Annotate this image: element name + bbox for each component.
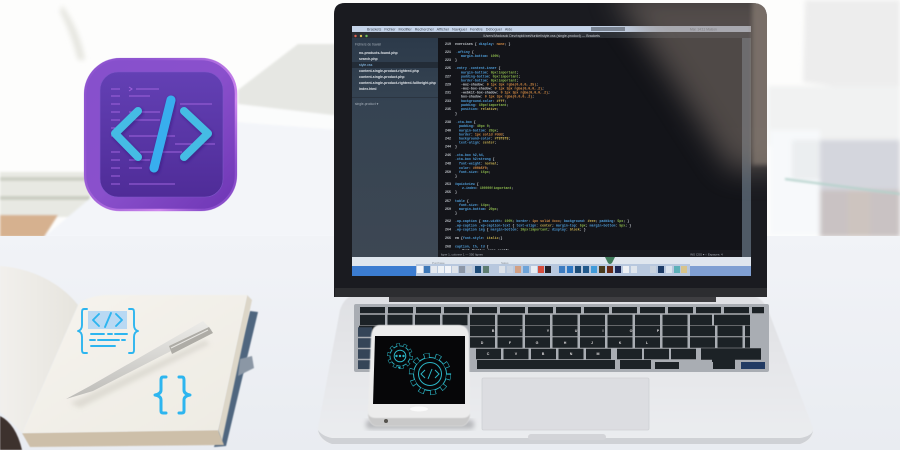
code editor: } (455, 211, 457, 215)
file sidebar: content-single-product-rightred-fullheight.php (359, 81, 436, 85)
code editor: border: 1px solid #ddd; (459, 132, 505, 136)
code editor: padding: 40px 0; (459, 124, 491, 128)
keyboard keys: V (515, 352, 518, 356)
keyboard keys: P (657, 329, 660, 333)
phone shadow (366, 420, 474, 429)
code editor: .entry .content-inner { (455, 66, 501, 70)
file sidebar: index.html (359, 87, 377, 91)
icon: curly braces (155, 377, 190, 413)
menu bar (352, 26, 751, 32)
code editor: z-index: 100000!important; (462, 186, 513, 190)
code editor: 242 (445, 136, 451, 140)
code editor: -moz-shadow: 0 1px 3px rgba(0,0,0,.25); (461, 82, 538, 86)
gear: large with code symbol (412, 356, 448, 392)
badge body (84, 58, 237, 211)
file sidebar: search.php (359, 57, 378, 61)
notebook page block (22, 430, 224, 447)
notebook right page (22, 295, 247, 433)
gear: small with dots (389, 345, 411, 367)
code editor: .cta-box { (456, 120, 476, 124)
code editor: font-size: 16px; (459, 170, 491, 174)
code editor: 231 (445, 90, 451, 94)
keyboard well (354, 304, 769, 372)
code editor: color: #00b5f0; (459, 166, 489, 170)
code editor: .wp-caption .wp-caption-text { text-align: center; margin-top: 5px; margin-bottom: 5px; } (455, 224, 631, 228)
pen shadow (70, 340, 210, 408)
keyboard keys: B (542, 352, 545, 356)
keyboard keys: G (536, 341, 539, 345)
keyboard keys: I (602, 329, 604, 333)
phone (366, 325, 474, 429)
phone screen (373, 336, 465, 404)
badge rim highlight (85, 59, 236, 210)
keyboard keys: C (487, 352, 490, 356)
code editor: font-size: 14px; (459, 203, 491, 207)
notebook left page (0, 266, 78, 433)
notebook cover edge (214, 311, 258, 447)
icon: purple code app badge (84, 58, 237, 211)
code editor: padding: 10px!important; (461, 103, 509, 107)
code editor: 219 (445, 42, 451, 46)
screen (352, 26, 751, 276)
phone home button (410, 406, 428, 412)
notebook (0, 266, 258, 450)
keyboard keys: N (570, 352, 573, 356)
keyboard keys: F (509, 341, 512, 345)
chevron left (115, 111, 138, 157)
phone port (384, 419, 388, 423)
code editor: 238 (445, 120, 451, 124)
title bar: /Users/Madosok Dev/rapid/wet/turkiet/style.css (single-product) — Brackets (483, 34, 600, 38)
keyboard keys: B (492, 329, 495, 333)
code editor: 221 (445, 50, 451, 54)
code editor: .wp-caption { max-width: 100%; border: 1px solid #ccc; background: #eee; padding: 5px; } (455, 219, 629, 223)
code editor: box-shadow: 0 1px 3px rgba(0,0,0,.2); (461, 94, 534, 98)
code editor: 262 (445, 219, 451, 223)
code editor: .wp-caption img { margin-bottom: 10px!important; display: block; } (455, 228, 586, 232)
code editor: } (455, 58, 457, 62)
slash (154, 100, 171, 168)
code editor: 227 (445, 74, 451, 78)
code editor: .aftiny { (456, 50, 474, 54)
code editor: font-weight: normal; (459, 162, 499, 166)
keyboard keys: O (630, 329, 633, 333)
code editor: #quickview { (455, 182, 479, 186)
code editor: table { (455, 199, 469, 203)
code editor: position: relative; (461, 107, 499, 111)
code editor: 248 (445, 162, 451, 166)
code editor: 259 (445, 207, 451, 211)
code editor: 233 (445, 99, 451, 103)
code editor: 266 (445, 236, 451, 240)
code editor: 268 (445, 244, 451, 248)
code editor: caption, th, td { (455, 244, 489, 248)
code editor: .cta-box h2>strong { (455, 157, 495, 161)
menu bar: Mar. 14:11 Maison (690, 28, 717, 32)
file sidebar: Fichiers de travail (355, 42, 381, 46)
code editor: margin-bottom: 0px!important; (461, 70, 518, 74)
keyboard keys: U (575, 329, 578, 333)
dock strip: Purchase (432, 261, 445, 265)
file sidebar: content-single-product.php (359, 75, 404, 79)
code editor: } (455, 190, 457, 194)
code editor: -moz-box-shadow: 0 1px 3px rgba(0,0,0,.2); (461, 86, 544, 90)
code editor: 229 (445, 82, 451, 86)
notebook strap (238, 356, 254, 376)
icon: code card with braces (78, 309, 138, 353)
status bar: INS CSS ▾ ○ Espaces: 4 (690, 252, 723, 256)
keyboard keys: M (596, 352, 600, 356)
keyboard keys (358, 310, 765, 366)
notebook dark corner object (0, 416, 22, 450)
keyboard keys: K (619, 341, 622, 345)
laptop (318, 0, 813, 444)
title bar (352, 32, 751, 38)
laptop base (318, 296, 813, 444)
code editor: margin-bottom: 20px; (459, 128, 499, 132)
code editor: 255 (445, 190, 451, 194)
right strip of screen (742, 38, 751, 257)
desk surface (0, 236, 900, 450)
code editor: 225 (445, 66, 451, 70)
code editor: em {font-style: italic;} (455, 236, 503, 240)
dock strip (352, 257, 751, 276)
lid bottom edge (335, 288, 767, 297)
code editor: margin-bottom: 100%; (461, 54, 501, 58)
code editor: 235 (445, 107, 451, 111)
code lines (111, 87, 215, 184)
keyboard keys: J (591, 341, 593, 345)
notebook right side pages (218, 295, 252, 441)
menu bar: Brackets Fichier Modifier Rechercher Afficher Naviguer Fenêtre Déboguer Aide (367, 28, 512, 32)
file sidebar: no-products-found.php (359, 51, 398, 55)
code editor: text-align: center; (459, 140, 497, 144)
code editor: } (455, 144, 457, 148)
code editor: } (455, 174, 457, 178)
code editor: 257 (445, 199, 451, 203)
code editor: 253 (445, 182, 451, 186)
code editor: 246 (445, 153, 451, 157)
code editor: } (455, 112, 457, 116)
laptop base lower lip (318, 430, 813, 444)
keyboard keys: H (564, 341, 567, 345)
code editor: font-family: sans-serif; (462, 248, 510, 252)
lid (334, 0, 790, 297)
code editor: 264 (445, 228, 451, 232)
file sidebar (352, 38, 438, 257)
file sidebar: style.css (359, 63, 373, 67)
front notch (528, 434, 606, 440)
file sidebar: content-single-product-rightred.php (359, 69, 419, 73)
pen (66, 321, 213, 399)
code editor: 223 (445, 58, 451, 62)
dock strip: Sales (501, 261, 509, 265)
badge inner panel (100, 72, 223, 197)
keyboard keys: D (481, 341, 484, 345)
chevron right (184, 111, 208, 157)
code editor: background-color: #f8f8f8; (459, 136, 510, 140)
code editor: -webkit-box-shadow: 0 1px 3px rgba(0,0,0,.2); (461, 90, 550, 94)
code editor: 250 (445, 170, 451, 174)
code editor: 240 (445, 128, 451, 132)
hinge (389, 290, 716, 302)
code editor: background-color: #fff; (461, 99, 507, 103)
code editor: 244 (445, 144, 451, 148)
screen reflection (610, 0, 790, 170)
file sidebar: single-product ▾ (355, 102, 379, 106)
code editor: exercises { display: none; } (455, 42, 510, 46)
code editor (445, 42, 631, 252)
phone body (368, 325, 470, 426)
status bar: ligne 1, colonne 1 — 350 lignes (441, 252, 483, 256)
code editor: padding-bottom: 0px!important; (461, 74, 520, 78)
keyboard keys: T (520, 329, 523, 333)
phone lower side (368, 412, 470, 426)
trackpad (482, 378, 649, 430)
code editor: .cta-box h2,h4, (455, 153, 485, 157)
code editor: margin-bottom: 20px; (459, 207, 499, 211)
keyboard keys: L (646, 341, 649, 345)
code editor: border-bottom: 0px!important; (461, 78, 518, 82)
status bar (441, 250, 723, 256)
keyboard keys: Y (547, 329, 550, 333)
